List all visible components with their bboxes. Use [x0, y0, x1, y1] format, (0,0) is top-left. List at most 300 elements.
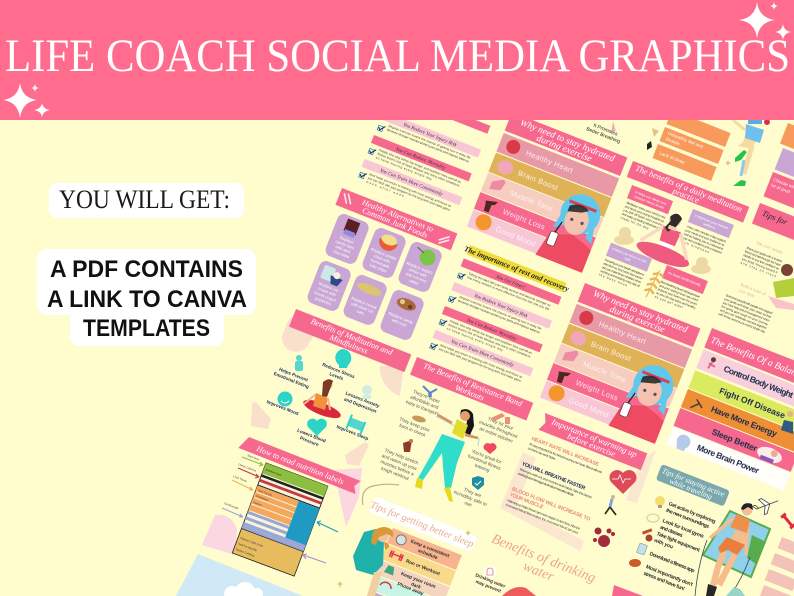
panel: hydration 2: Why need to stay hydrated	[591, 289, 689, 335]
nutrition facts chart: Sodium	[253, 500, 262, 507]
checklist: recovery benefits: You Can Train More Consistently	[450, 339, 515, 369]
label: drinking water	[473, 572, 507, 594]
callout: form check	[396, 416, 431, 439]
card: meditation benefit 1: It helps you sleep and	[635, 190, 667, 206]
row: more energy: Have More Energy	[710, 404, 779, 439]
panel: benefit checklist top	[356, 87, 490, 218]
callout: affordable	[405, 388, 444, 417]
label: blood pressure: Pressure	[299, 435, 320, 447]
checklist: recovery benefits: Rest helps you return to training with more energy and focus so	[440, 343, 523, 379]
card: meditation benefit 2: It improves your mental	[694, 214, 728, 230]
card: meditation benefit 4	[654, 265, 708, 314]
nutrition facts chart: Total Fat 65g 80g	[237, 541, 258, 552]
illustration: person with laptop	[768, 264, 794, 310]
panel: travel tips	[629, 464, 781, 596]
callout: muscles	[476, 414, 521, 445]
text block: build a team: your goals and share your vision so that	[724, 297, 772, 319]
panel: benefit checklist top: Rest helps you return to training with more energy and focus so	[369, 172, 452, 208]
woman with band	[415, 409, 479, 502]
rows: workout tips	[760, 537, 794, 596]
card: meditation benefit 4: Slow breathing lowers blood pressure	[660, 280, 701, 299]
row: run or workout	[381, 544, 456, 586]
icon: blood cells	[593, 528, 615, 547]
label: drinking water: Drinking water	[475, 572, 507, 589]
callout: muscles: muscles throughout	[478, 419, 519, 439]
row: fight off disease	[688, 370, 794, 434]
row: pink card: lot of prod	[770, 182, 791, 195]
card: meditation benefit 3: the busy week	[598, 273, 628, 287]
checklist: recovery benefits	[429, 258, 561, 386]
checklist: recovery benefits: You Get Fitter!	[495, 275, 525, 291]
food card: coconut water: drinks with	[408, 267, 428, 278]
illustration: meditating woman	[634, 204, 705, 272]
heading ribbon: nutrition: How to read nutrition labels	[254, 444, 345, 486]
panel: right column cards	[718, 123, 794, 334]
icon: sparkles right	[739, 2, 791, 40]
food card: coconut water	[397, 240, 444, 294]
text block: warm up benefits: so that it can work better.	[527, 446, 557, 461]
icon: arm muscles	[491, 413, 510, 424]
text block: warm up benefits: your body uses more oxygen and makes more carbon dioxide	[517, 471, 575, 497]
heading band: healthy alternatives	[335, 188, 457, 250]
text block: warm up benefits: When you work out, your muscles work harder. Take this deeper.	[519, 467, 593, 500]
food card: dark chocolate: chocolate	[332, 248, 351, 260]
callout: safe	[451, 484, 490, 513]
card: meditation benefit 4: and your resting heart rate which	[659, 283, 699, 303]
card: meditation benefit 1: and wake up feeling refreshed and	[621, 212, 662, 231]
row: lavender relax	[367, 590, 384, 596]
callout: safe: incredibly safe to	[453, 489, 488, 507]
panel: hydration 1: Brain Boost	[517, 168, 560, 193]
checklist: recovery benefits: People who stay active live longer and healthier lives overall as	[449, 319, 533, 355]
row: run or workout: Run or Workout	[405, 558, 441, 577]
text block: build a team: and you can celebrate success together	[719, 308, 767, 330]
label: anxiety: Lessens Anxiety	[345, 391, 381, 409]
heading band: tips: Tips for	[761, 208, 790, 227]
illustration: runner	[725, 119, 770, 186]
nutrition facts chart	[232, 463, 328, 576]
callout: warm up: tough workout	[380, 466, 410, 481]
tip text: local gyms: Look for local gyms	[662, 518, 705, 540]
card: meditation benefit 4: protects your heart over the years	[657, 287, 698, 306]
food card: kale chips	[361, 226, 408, 280]
heading band: resistance: The Benefits of Resistance Band	[422, 361, 524, 409]
panel: benefit checklist top: Regular exercise lowers the chance of getting hurt in daily life	[388, 124, 471, 160]
food card: greek yogurt	[306, 259, 353, 313]
panel: rest and recovery	[429, 244, 571, 386]
text block: talk over: friend and talk through the hard	[744, 249, 781, 267]
nutrition facts chart: Cholesterol	[255, 494, 269, 502]
panel: daily meditation practice	[588, 161, 749, 320]
food card: greek yogurt: cream with	[317, 286, 337, 297]
label: emotional eating: Helps Prevent	[278, 367, 309, 383]
icon: water head	[484, 566, 496, 578]
icon: red dumbbell	[781, 513, 794, 529]
heading band: resistance	[410, 357, 533, 420]
arrows with callouts	[222, 453, 338, 563]
card: meditation benefit 4: as you get older	[654, 295, 684, 309]
text: it promotes better breathing: Better Breathing	[585, 126, 621, 145]
icon: eating figure	[295, 355, 303, 371]
food card: nuts: Replace candy	[388, 311, 414, 325]
heading band: meditation	[289, 309, 411, 372]
text block: talk over: you keep moving toward it	[741, 257, 778, 275]
tip text: have fun: stress and have fun!	[642, 571, 686, 593]
text block: warm up benefits: YOUR MUSCLE	[508, 492, 545, 511]
card: meditation benefit 1: ready for the day	[620, 215, 650, 230]
label: stress levels: Reduces Stress	[322, 362, 356, 379]
panel: sleep tips	[337, 484, 477, 596]
callout: warm up: muscles before a	[380, 459, 415, 477]
icon: airplane	[751, 493, 781, 517]
curved arrow	[362, 484, 399, 505]
panel: hydration 2	[540, 283, 700, 444]
panel: meditation and mindfulness	[251, 309, 411, 466]
card: meditation benefit 2: A few calm minutes a day support	[686, 224, 727, 244]
label: improves mood: Improves Mood	[266, 399, 299, 416]
illustration: person drinking	[502, 587, 536, 596]
food card: dark chocolate	[324, 212, 371, 266]
food card: greek yogurt: Replace ice	[318, 281, 340, 293]
callout: affordable: They're super	[412, 389, 441, 404]
checklist: recovery benefits: that every session is more effective than the last one you did	[466, 275, 550, 311]
row: more energy	[681, 389, 794, 453]
text block: talk over: Talk over details	[755, 240, 784, 255]
arrows with callouts: Get Enough	[224, 501, 239, 510]
text: it promotes better breathing	[585, 113, 626, 145]
panel: hydration 1: Healthy Heart	[524, 148, 575, 175]
label: stress levels: Levels	[329, 371, 344, 381]
row: control body weight	[696, 349, 794, 414]
card: meditation benefit 2	[680, 209, 734, 259]
panel: resistance band workouts	[377, 357, 533, 513]
callout: affordable: affordable and	[410, 394, 440, 410]
food card: coconut water: Replace sugary	[406, 260, 434, 275]
callout: warm up: and warm up your	[381, 453, 418, 472]
checklist: recovery benefits: You Can Reduce Mortality	[466, 318, 518, 342]
row: control body weight: Control Body Weight	[722, 364, 794, 400]
food card: nuts	[379, 288, 426, 342]
card: meditation benefit 3: and you make fewer mistakes when	[601, 265, 642, 284]
panel: hydration 2: Weight Loss	[574, 378, 620, 403]
panel: hydration 1: Good Mood	[494, 225, 537, 249]
heading band: tips	[752, 203, 794, 253]
card: meditation benefit 2: with kindness	[680, 239, 710, 254]
icon: runner	[605, 495, 616, 515]
callout: pdf contains link: TEMPLATES	[83, 315, 210, 342]
panel: hydration 2: during exercise	[608, 305, 666, 336]
text block: build a team: Build a team of	[740, 282, 767, 297]
heading band: resistance: Workouts	[454, 383, 485, 403]
heading band: rest and recovery: The importance of rest and recovery	[463, 244, 571, 294]
row: sleep better	[674, 408, 794, 472]
panel: warming up	[500, 413, 656, 551]
heading ribbon: nutrition	[238, 435, 361, 494]
nutrition facts chart: Calories 2,000 2,500	[240, 536, 264, 548]
panel: benefit checklist top: You Reduce Your Injury Risk	[402, 123, 458, 149]
food card: kale chips: Replace potato	[370, 247, 398, 261]
panel: benefit checklist top: so keep moving every single day	[375, 155, 433, 181]
card: meditation benefit 2: well as helping you to understand	[683, 232, 724, 251]
label: anxiety: and Depression	[343, 397, 377, 414]
card: meditation benefit 1: you drift off faster each evening	[623, 208, 663, 227]
panel: hydration 1: during exercise	[535, 134, 593, 165]
icon: calm person	[362, 385, 372, 399]
label: emotional eating: Emotional Eating	[273, 371, 310, 389]
heading band: meditation: Benefits of Meditation and	[310, 317, 395, 357]
text block: warm up benefits: HEART RATE WILL INCREASE	[530, 436, 600, 468]
row: sleep better: Sleep Better	[710, 427, 759, 454]
decorative oats	[614, 227, 711, 274]
callout: functional fitness: You're great for	[471, 448, 503, 465]
card: meditation benefit 1: Meditation trains your mind to rest	[626, 201, 666, 220]
food card: kale chips: kale chips	[369, 262, 387, 273]
panel: benefit checklist top: you can stick with your program for the long term and make gains	[367, 176, 451, 212]
card: meditation benefit 3: attention so that tasks feel easier	[603, 261, 643, 281]
heading badge: travel: while traveling	[668, 476, 714, 501]
nutrition facts chart: Nutrition Facts	[265, 467, 283, 477]
icon: phone	[636, 543, 648, 555]
text block: build a team	[718, 278, 779, 334]
callout: you will get: YOU WILL GET:	[59, 185, 230, 214]
heading band: healthy alternatives: Common Junk Foods	[361, 206, 429, 240]
food card: steel cut oats: oats	[356, 308, 365, 316]
card: meditation benefit 3: task	[624, 256, 631, 262]
text block: warm up benefits: Warming up helps tissues get more oxygen so less fuss. Also the	[507, 498, 581, 531]
heading ribbon: warming up: before exercise	[566, 431, 617, 459]
card: meditation benefit 2: wellness	[703, 222, 717, 230]
text block: talk over: and stay on track	[740, 261, 777, 278]
heading badge: travel	[656, 464, 730, 507]
row: consistent schedule: schedule	[417, 548, 439, 561]
arrows with callouts: Check Calories	[238, 462, 257, 473]
panel: hydration 1	[467, 112, 627, 273]
row: unhealthy diet: Unhealthy diet and	[667, 131, 704, 149]
row: room dark: dark	[410, 581, 422, 591]
star accents	[337, 530, 471, 588]
illustration: sleeping woman	[353, 527, 393, 596]
heading badge: travel: Tips for staying active	[661, 466, 727, 499]
callout: affordable: easy to transport	[405, 399, 440, 417]
icon: band loop	[411, 414, 427, 424]
row: lack of sleep: Lack of sleep	[659, 150, 686, 165]
heading band: bottom panel	[612, 585, 643, 596]
callout: form check: They keep your	[399, 416, 431, 433]
callout: warm up: They help stretch	[384, 448, 420, 466]
row: unhealthy diet: lifestyle	[665, 136, 681, 147]
heading: benefits of drinking water: water	[521, 559, 556, 585]
panel: right lower workout list	[760, 513, 794, 596]
heading ribbon: sleep: Tips for getting better sleep	[369, 500, 475, 550]
card: meditation benefit 4: It's heart health friendly	[667, 271, 702, 287]
icon: light bulb	[655, 496, 665, 508]
row: lavender card	[775, 148, 794, 192]
food card: greek yogurt: popsicles	[315, 295, 332, 306]
tip text: explore: Get active by exploring	[668, 501, 716, 525]
arrows with callouts: Limit These	[233, 474, 248, 483]
callout: muscles: They hit your	[487, 416, 514, 431]
callout: muscles: an entire session	[479, 426, 514, 444]
tip text: explore: the new surroundings	[665, 508, 710, 530]
panel: benefit checklist top: People who stay active live longer and healthier lives overall as	[378, 148, 462, 184]
icon: turtle	[629, 559, 641, 567]
icon: yoga figure	[781, 411, 793, 434]
decorative blobs	[251, 315, 404, 466]
panel: nutrition labels	[176, 435, 362, 596]
card: meditation benefit 3: It helps you focus on the	[611, 247, 647, 264]
panel: common causes orange list	[647, 110, 731, 181]
callout: safe: use	[464, 500, 473, 508]
panel: benefit checklist top: week after week	[366, 180, 405, 198]
nutrition facts chart: Total Fat 10g	[257, 488, 273, 497]
tip text: equipment: with you	[652, 537, 674, 551]
icon: equipment	[642, 528, 652, 542]
nutrition facts chart: Sodium 2,400mg	[235, 547, 256, 558]
text block: build a team: your deal	[738, 288, 755, 298]
text block: build a team: the going gets tough on your journey	[721, 304, 769, 327]
food card: steel cut oats: Replace cereal	[351, 296, 377, 310]
food card: nuts: with nuts	[391, 317, 407, 328]
panel: hydration 2: Muscle Tone	[582, 359, 628, 384]
checklist: recovery benefits: Regular exercise lowers the chance of getting hurt in daily life	[459, 295, 542, 331]
card: meditation benefit 3: Focusing on your breath strengthens	[604, 258, 645, 277]
callout: form check: form in check	[398, 423, 427, 438]
row: more brain power: More Brain Power	[696, 442, 761, 476]
heading band: meditation: Mindfulness	[328, 332, 369, 356]
label: drinking water: may prevent	[475, 579, 502, 594]
panel: healthy alternatives	[306, 188, 457, 342]
callout: pdf contains link	[37, 249, 256, 346]
card: meditation benefit 3	[598, 243, 652, 292]
blobs	[202, 468, 362, 555]
icon: leaf and butterfly	[647, 128, 659, 150]
text block: warm up benefits: increased blood flow makes the increased blood get your	[505, 503, 580, 535]
row: orange card	[780, 123, 794, 167]
icon: stretching figure	[423, 386, 437, 397]
panel: benefit checklist top: fitness lowers risk of heart disease and many other conditions	[377, 152, 460, 188]
tip text: fitness app: Download a fitness app	[649, 551, 695, 574]
panel: hydration 2: Good Mood	[567, 396, 610, 420]
panel: hydration 1: Weight Loss	[501, 207, 547, 232]
food card: dark chocolate: with dark	[335, 244, 351, 254]
card: meditation benefit 1: reduces stress levels	[634, 195, 665, 210]
illustration: jump rope woman	[695, 503, 753, 596]
row: consistent schedule	[387, 528, 462, 570]
checklist: recovery benefits: You Reduce Your Injury Risk	[473, 294, 529, 320]
heading ribbon: warming up	[538, 413, 647, 470]
food card: steel cut oats	[342, 273, 389, 327]
food card: greek yogurt: Greek yogurt	[313, 290, 338, 303]
card: meditation benefit 1	[619, 185, 673, 235]
food card: steel cut oats: with steel cut	[350, 301, 375, 314]
checklist: recovery benefits: so keep moving every single day	[446, 326, 504, 352]
row: unhealthy diet	[660, 127, 724, 164]
card: meditation benefit 1: and slows your racing thoughts so	[624, 204, 665, 224]
card: meditation benefit 2: your own emotions and to respond	[682, 236, 722, 255]
row: inadequate training	[667, 110, 731, 147]
icon: calm head	[335, 349, 351, 368]
illustration: map	[703, 511, 770, 577]
panel: benefit checklist top: because stronger muscles protect your joints and improve balance	[386, 128, 470, 164]
text block: talk over: Share your goals with a trusted	[746, 246, 783, 263]
text block: build a team: you have help and encouragement when	[722, 301, 770, 323]
checklist: recovery benefits: Taking rest days lets your body recover and become stronger so	[468, 272, 551, 308]
text block: talk over	[740, 237, 786, 278]
tip text: equipment: Take light equipment	[656, 531, 701, 554]
row: fight off disease: Fight Off Disease	[718, 386, 787, 421]
food card: kale chips: homemade	[370, 257, 391, 269]
heading band: healthy alternatives: Healthy Alternatives to	[360, 197, 435, 234]
icon: heart rate	[610, 470, 636, 494]
food card: dark chocolate: candy bars	[335, 239, 355, 250]
text block: warm up benefits: BLOOD FLOW WILL INCREASE TO	[511, 486, 591, 523]
tip text: have fun: Most importantly don't	[645, 564, 694, 588]
panel: hydration 2: Healthy Heart	[597, 319, 648, 346]
callout: functional fitness	[465, 448, 504, 477]
panel: hydration 1: Why need to stay hydrated	[518, 118, 616, 164]
header band	[0, 0, 794, 120]
icon: heart	[307, 419, 327, 436]
panel: hydration 2: Brain Boost	[590, 339, 633, 364]
checklist: recovery benefits: you can stick with your program for the long term and make gains	[438, 347, 522, 383]
icon: stretching band	[403, 439, 413, 452]
row: consistent schedule: Keep a consistent	[410, 539, 450, 559]
icon: red heart arms	[484, 443, 496, 454]
callout: functional fitness: training	[474, 463, 491, 473]
panel: benefit checklist top: You Can Train More Consistently	[379, 168, 444, 198]
callout: warm up	[377, 447, 420, 483]
card: meditation benefit 2: your mood and your resilience as	[685, 228, 726, 247]
row: more brain power	[666, 427, 790, 490]
row: phone away	[370, 575, 428, 596]
arrows with callouts: Start Here	[247, 453, 260, 462]
panel: benefit checklist top: You Can Reduce Mortality	[395, 147, 447, 171]
text block: warm up benefits: YOU WILL BREATHE FASTER	[521, 461, 586, 492]
heading band: daily meditation: The benefits of a daily meditation	[634, 163, 744, 214]
checklist: recovery benefits: because stronger muscles protect your joints and improve balance	[457, 299, 541, 335]
callout: pdf contains link: A LINK TO CANVA	[47, 286, 247, 313]
label: blood pressure	[294, 428, 327, 449]
icon: shield	[472, 476, 484, 490]
label: improves sleep: Improves Sleep	[336, 424, 369, 441]
text block: talk over: details so you feel confident as	[743, 253, 780, 271]
food card: dark chocolate: Replace	[339, 235, 355, 245]
panel: balanced diet	[666, 328, 794, 492]
peach backdrop	[500, 450, 656, 551]
callout: pdf contains link: A PDF CONTAINS	[50, 256, 243, 283]
panel: hydration 1: Muscle Tone	[509, 188, 555, 213]
tip text: local gyms: and classes	[659, 525, 684, 539]
heading: benefits of drinking water: Benefits of drinking	[489, 532, 598, 586]
icon: sparkles left	[3, 83, 50, 118]
icon: smiley	[278, 392, 292, 406]
icon: meditating woman	[301, 379, 343, 422]
label: stress levels	[319, 362, 356, 385]
card: meditation benefit 3: working and studying every day of	[600, 269, 640, 288]
row: pink card	[763, 172, 794, 219]
text block: build a team: with those around you every single day	[718, 312, 766, 334]
illustration: wheat	[642, 268, 665, 301]
text block: warm up benefits	[505, 436, 611, 537]
text: it promotes better breathing: It Promotes	[592, 123, 619, 138]
food card: coconut water: water	[409, 278, 420, 286]
card: meditation benefit 4: so you can stay active and healthy	[656, 291, 697, 310]
callout: functional fitness: functional fitness	[467, 453, 502, 471]
callout: safe: They are	[463, 487, 482, 498]
food card: kale chips: chips with	[373, 253, 391, 264]
label: blood pressure: Lowers Blood	[297, 428, 327, 444]
icon: gym	[647, 514, 659, 522]
